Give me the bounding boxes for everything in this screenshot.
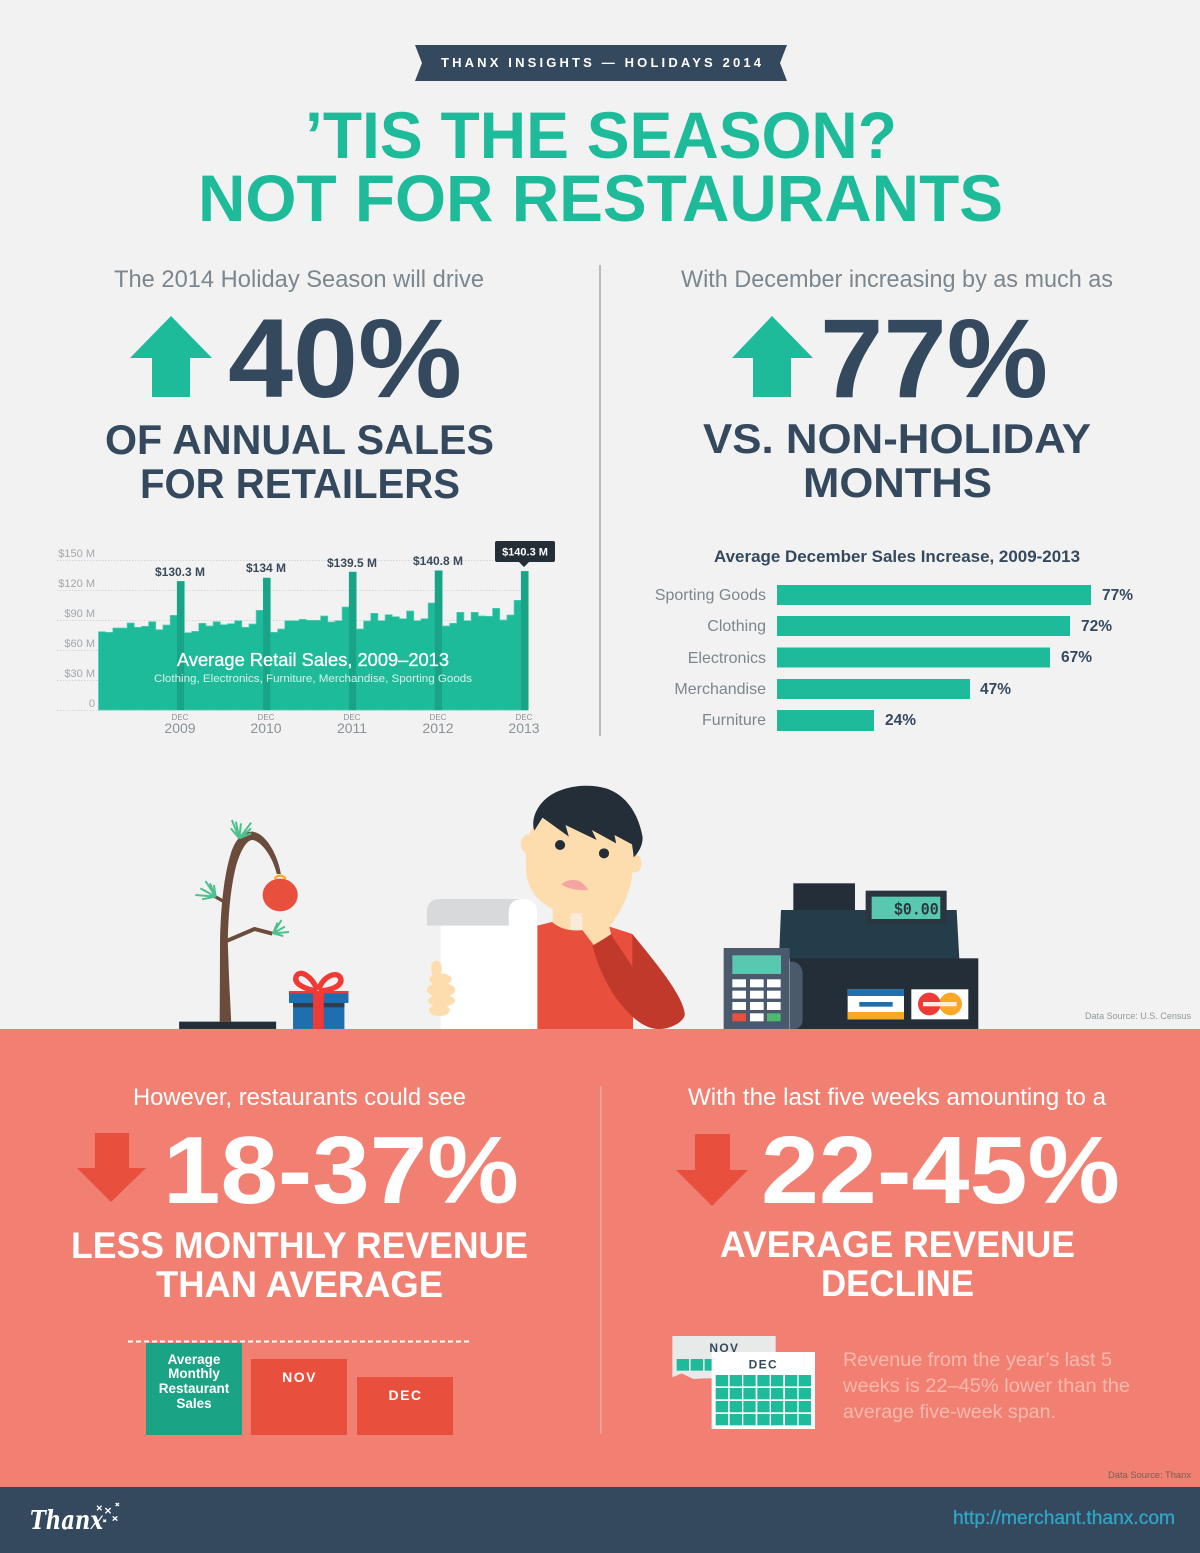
bar: average: Sales <box>176 1396 212 1411</box>
value labels: 67% <box>1061 649 1092 666</box>
x axis labels: 2010 <box>250 720 282 736</box>
subheading left: OF ANNUAL SALES <box>105 416 494 463</box>
data source: census: Data Source: U.S. Census <box>1085 1011 1191 1022</box>
panel: retail stat <box>105 266 494 507</box>
intro text restaurants: However, restaurants could see <box>133 1084 466 1111</box>
december value labels: $130.3 M <box>155 565 205 579</box>
y axis labels: $90 M <box>64 608 95 620</box>
subheading monthly revenue: LESS MONTHLY REVENUE <box>71 1225 528 1266</box>
bar: november: NOV <box>282 1369 317 1385</box>
illustration: tree, gift, person <box>179 786 685 1029</box>
x axis labels: DEC <box>258 713 275 722</box>
category labels <box>655 587 766 729</box>
x axis labels: DEC <box>344 713 361 722</box>
x axis labels: DEC <box>430 713 447 722</box>
area chart: average retail sales <box>57 541 555 736</box>
calendar: december <box>712 1352 815 1429</box>
december value labels: $139.5 M <box>327 556 377 570</box>
category labels: Electronics <box>688 650 766 667</box>
revenue explanation text: weeks is 22–45% lower than the <box>842 1376 1130 1397</box>
bar: november <box>251 1359 347 1435</box>
icon: ornament <box>263 876 298 911</box>
icon: tree <box>195 820 289 1022</box>
x axis labels: 2009 <box>164 720 196 736</box>
icon: credit card two <box>911 989 968 1019</box>
panel: monthly revenue <box>71 1084 528 1435</box>
logo: Thanx <box>30 1506 103 1536</box>
person <box>521 786 685 1029</box>
value labels <box>885 587 1133 729</box>
register drawer <box>790 958 978 1029</box>
subheading right <box>703 415 1091 506</box>
panel: revenue decline <box>672 1084 1130 1429</box>
icon: up arrow right <box>732 316 813 397</box>
panel: december stat <box>681 266 1113 506</box>
icon: credit card <box>848 989 904 1019</box>
value labels: 72% <box>1081 618 1112 635</box>
calendar: november: NOV <box>709 1341 739 1355</box>
calendar: november <box>672 1336 776 1379</box>
eyes <box>555 840 565 850</box>
stat: 77 percent: 77% <box>820 296 1048 421</box>
y axis labels: 0 <box>89 698 95 710</box>
x axis labels <box>164 713 540 736</box>
title: ’TIS THE SEASON? <box>305 98 897 172</box>
subheading monthly revenue <box>71 1225 528 1305</box>
icon: down arrow left <box>77 1133 146 1202</box>
bars <box>777 585 1091 731</box>
header ribbon <box>415 45 787 81</box>
bar chart title: Average December Sales Increase, 2009-2013 <box>714 547 1080 566</box>
neck <box>553 903 584 931</box>
comparison bars <box>128 1342 470 1435</box>
register display <box>866 891 947 924</box>
icon: hand holding scroll <box>427 961 455 1016</box>
data source: thanx: Data Source: Thanx <box>1108 1470 1191 1481</box>
tree base <box>179 1022 276 1029</box>
subheading right: MONTHS <box>803 459 992 506</box>
subheading left: FOR RETAILERS <box>140 460 460 507</box>
bar: average <box>146 1343 242 1435</box>
december value labels: $134 M <box>246 561 286 575</box>
monthly sales area <box>98 571 528 710</box>
stat: 40 percent: 40% <box>228 296 462 421</box>
x axis labels: DEC <box>172 713 189 722</box>
icon: calendars <box>672 1336 815 1429</box>
y axis labels: $120 M <box>58 578 95 590</box>
category labels: Clothing <box>707 618 766 635</box>
ears <box>521 834 642 873</box>
shirt <box>537 922 633 1029</box>
x axis labels: 2011 <box>337 720 367 736</box>
card reader cable <box>790 962 803 1029</box>
category labels: Furniture <box>702 712 766 729</box>
december value labels: $140.8 M <box>413 554 463 568</box>
subheading right: VS. NON-HOLIDAY <box>703 415 1091 462</box>
bar chart: december sales increase <box>655 547 1133 731</box>
card terminal <box>724 948 790 1029</box>
illustration: cash register <box>724 883 978 1029</box>
value labels: 47% <box>980 681 1011 698</box>
tooltip <box>495 541 555 567</box>
x axis labels: 2013 <box>508 720 540 736</box>
intro text left: The 2014 Holiday Season will drive <box>114 266 484 293</box>
register upper body <box>779 910 959 959</box>
header ribbon: THANX INSIGHTS — HOLIDAYS 2014 <box>441 55 762 70</box>
icon: down arrow right <box>676 1134 748 1206</box>
x axis labels: 2012 <box>422 720 454 736</box>
chart caption: Average Retail Sales, 2009–2013 <box>177 650 449 670</box>
bar: december: DEC <box>388 1387 423 1403</box>
tooltip: $140.3 M <box>502 546 548 558</box>
revenue explanation text: average five-week span. <box>843 1402 1056 1423</box>
december value labels <box>155 554 463 579</box>
category labels: Sporting Goods <box>655 587 766 604</box>
y axis labels <box>58 548 95 710</box>
stat: 18-37 percent: 18-37% <box>163 1117 519 1224</box>
subheading decline: AVERAGE REVENUE <box>720 1224 1075 1265</box>
y axis labels: $60 M <box>64 638 95 650</box>
subheading left <box>105 416 494 507</box>
subheading monthly revenue: THAN AVERAGE <box>156 1264 443 1305</box>
bar: average: Monthly <box>168 1366 220 1381</box>
footer <box>0 1487 1200 1553</box>
register display: $0.00 <box>894 900 939 920</box>
neck highlight <box>571 913 582 930</box>
face and supporting hand <box>526 810 632 946</box>
sleeve <box>592 934 685 1029</box>
category labels: Merchandise <box>674 681 766 698</box>
receipt slot <box>793 883 855 911</box>
bar: december <box>357 1377 453 1435</box>
title <box>198 98 1003 235</box>
value labels: 77% <box>1102 587 1133 604</box>
subheading decline <box>720 1224 1075 1304</box>
bar: average: Average <box>168 1352 221 1367</box>
title: NOT FOR RESTAURANTS <box>198 161 1003 235</box>
icon: up arrow left <box>130 316 212 397</box>
y axis labels: $150 M <box>58 548 95 560</box>
y axis labels: $30 M <box>64 668 95 680</box>
chart caption <box>154 650 473 685</box>
bar: average: Restaurant <box>159 1381 230 1396</box>
calendar: december: DEC <box>749 1357 778 1371</box>
stat: 22-45 percent: 22-45% <box>761 1117 1120 1224</box>
mouth <box>561 880 588 890</box>
icon: paper scroll <box>427 899 537 1029</box>
icon: gift <box>289 973 348 1029</box>
subheading decline: DECLINE <box>821 1263 974 1304</box>
intro text right: With December increasing by as much as <box>681 266 1113 293</box>
panel: restaurant section background <box>0 1029 1200 1487</box>
intro text five weeks: With the last five weeks amounting to a <box>688 1084 1107 1111</box>
footer url: http://merchant.thanx.com <box>953 1508 1175 1529</box>
chart caption: Clothing, Electronics, Furniture, Merchandise, Sporting Goods <box>154 673 473 685</box>
revenue explanation text <box>842 1350 1130 1423</box>
value labels: 24% <box>885 712 916 729</box>
x axis labels: DEC <box>516 713 533 722</box>
hair <box>533 786 643 857</box>
revenue explanation text: Revenue from the year’s last 5 <box>843 1350 1112 1371</box>
